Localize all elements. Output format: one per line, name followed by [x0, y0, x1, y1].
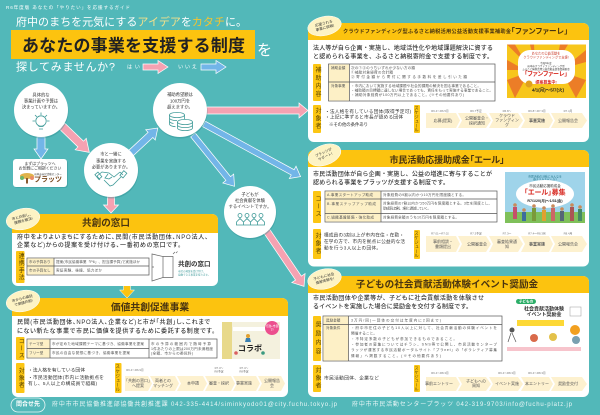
tag: schedule: スケジュール — [414, 366, 420, 392]
arrow: no to Yell — [201, 118, 304, 183]
badge: value co-creation: 市からの委託 — [11, 293, 34, 303]
legend: yes arrow: はい — [127, 64, 140, 70]
chevron schedule: R6.4～R8.3月 — [431, 371, 449, 375]
tag: schedule: スケジュール — [414, 231, 420, 258]
icon: coins — [170, 112, 192, 131]
description: 企業など)からの提案を受け付ける、一番初めの窓口です。 — [17, 241, 181, 249]
contact pill — [11, 398, 45, 412]
circle: plan decided: 事業計画や予算は — [24, 98, 59, 104]
icon: door — [152, 252, 178, 281]
eligibility text: ・市民活動団体(市内に活動拠点を — [28, 374, 104, 381]
description: 認められる事業をプラッツが支援する制度です。 — [313, 178, 449, 186]
contact: Platz: 府中市市民活動センタープラッツ 042-319-9703/info@fuchu-platz.jp — [352, 400, 573, 408]
chevron schedule: R7.01～R7.02 — [431, 232, 449, 236]
chevron schedule: R7.3予定 — [470, 232, 482, 236]
tag: course — [313, 191, 321, 223]
table: course: B.事業ステップアップ助成 — [327, 201, 376, 206]
description — [17, 318, 215, 335]
legend: no arrow — [178, 60, 226, 74]
eligibility text: 在学の方で、市内を拠点に公益的な活 — [324, 238, 405, 245]
tag: course — [16, 337, 24, 360]
circle: plan decided: 具体的な — [32, 92, 50, 98]
image: Fanfare flyer — [507, 44, 586, 98]
description: と認められる事業を、ふるさと納税寄附金で支援する制度です。 — [313, 52, 493, 60]
chevron schedule: 子どもへの — [466, 378, 486, 384]
image: Yell flyer: 市民活動応援助成金 — [529, 183, 561, 188]
table: subsidy details: 対象事業 — [331, 83, 346, 88]
eligibility text: 市民活動団体、企業など — [324, 374, 379, 382]
chevron schedule — [426, 232, 587, 252]
table: course: A.事業スタートアップ助成 — [327, 192, 373, 197]
description: 民間(市民活動団体、NPO法人、企業など)と市が「共創」し、これまで — [17, 318, 210, 326]
table: course: 市の予算の範囲内で随時予算 — [151, 341, 211, 346]
table: course: フリー型 — [29, 350, 44, 355]
chevron schedule: R6.7予定 — [470, 109, 482, 113]
chevron schedule: 公開報告 — [264, 377, 280, 383]
table: subsidy details: ①補助対象経費の合計額 — [351, 70, 393, 74]
chevron schedule: 公開審査会・ — [465, 114, 489, 120]
table: subsidy details: ・補助対象経費が100万円以上であること。(※その他要件あり) — [351, 92, 464, 97]
chevron schedule: R6.8～R7.3月 — [528, 109, 546, 113]
table: course: C.組織基盤整備・強化助成 — [327, 214, 374, 220]
table: course: 助成率は5割、3割と逓減していく。 — [383, 206, 431, 210]
panel: Yell grant — [308, 150, 589, 266]
window label: 市民の発案を受け付け、 — [178, 269, 205, 273]
image: Fanfare flyer: 府中市クラウドファンディング型 — [527, 64, 565, 68]
tag: subsidy details — [313, 64, 321, 101]
arrow: yes to consultation window — [104, 196, 118, 213]
heading: 「ファンファーレ」 — [511, 26, 568, 36]
image: Yell flyer: R7/1/20(月)～1/31(金) — [527, 198, 563, 203]
panel: children's award — [308, 276, 589, 397]
badge: children's award — [306, 266, 343, 292]
tag: eligibility — [16, 363, 24, 393]
callout: Platz consultation: お気軽にご相談ください — [19, 166, 61, 170]
legend: yes arrow — [127, 60, 168, 74]
description: にない新たな事業で市民に価値を提供するために委託する制度です。 — [17, 327, 215, 335]
chevron schedule: 応募(提案) — [434, 117, 453, 123]
table: award details: 3万円/回(一団体の交付は年度内に2回まで) — [351, 318, 441, 322]
table: subsidy details: ②寄付金額から寄付に関する手数料を差し引いた額 — [351, 74, 467, 79]
table: method — [27, 258, 149, 275]
tag: schedule: スケジュール — [414, 106, 420, 133]
tag: method — [16, 251, 24, 283]
image: Yell flyer: 「エール」募集 — [524, 188, 566, 196]
chevron schedule: R8予定 — [239, 370, 249, 374]
eligibility text: 有し、5人以上の構成員で組織) — [28, 380, 97, 387]
callout: Platz consultation: 府中市市民活動センター — [34, 172, 62, 176]
table: award details: ラッツが運営する市民活動ポータルサイト「プラnet」の「ボランティア募集 — [351, 347, 497, 352]
table: award details: 対象条件 — [326, 325, 341, 330]
tag: eligibility — [313, 105, 321, 133]
tag: award details — [313, 316, 321, 361]
table: course: 市民の自由な発想に基づき、協働事業を提案 — [52, 350, 130, 355]
chevron schedule: 審査・採択 — [209, 380, 229, 386]
eligibility text: 動を行う3人以上の団体。 — [324, 244, 381, 252]
chevron schedule: R7.3～ — [215, 366, 224, 370]
tag: eligibility: 対象者 — [314, 367, 321, 390]
contact pill: 問合せ先 — [16, 400, 40, 408]
chevron schedule: 本エントリー — [525, 380, 549, 386]
eligibility text — [28, 366, 104, 387]
chevron schedule: 審査結果通 — [497, 238, 517, 244]
table: subsidy details — [328, 64, 495, 101]
chevron schedule — [425, 371, 587, 391]
people — [513, 203, 582, 221]
heading — [343, 26, 568, 36]
window label — [178, 259, 210, 276]
tag: eligibility: 対象者 — [314, 107, 321, 130]
chevron schedule: 公開審査会 — [467, 240, 487, 246]
eligibility text: ・法人格を有している団体(取得予定可) — [325, 108, 411, 115]
image: children's award flyer: イベント奨励金 — [526, 311, 562, 318]
table: subsidy details: 次の①②のうちいずれか少ない方の額 — [351, 65, 415, 70]
image: Yell flyer: 市民活動の活動にみんなを — [528, 174, 562, 178]
callout: Platz consultation: まずはプラッツへ — [24, 161, 56, 166]
chevron schedule: 事業実施 — [236, 380, 252, 386]
image: Yell flyer — [505, 172, 585, 223]
description: 法人等が自ら企画・実施し、地域活性化や地域課題解決に資する — [313, 44, 493, 52]
table: course — [27, 339, 217, 358]
eligibility text: ・法人格を有している団体 — [28, 366, 85, 374]
table: course: 対象経費の7割以内かつ50万円を限度額とする。3年を限度とし、 — [383, 200, 492, 206]
table: award details: 情報」へ掲載すること。(※その他要件あり) — [351, 353, 441, 358]
tag: schedule: スケジュール — [115, 364, 121, 392]
image: collaboration flyer: で! — [270, 328, 274, 332]
tag: award details: 奨励内容 — [314, 320, 321, 357]
circle: children's experience — [224, 186, 276, 240]
arrow: yes to children's award — [259, 226, 311, 291]
circle: over 1 million yen: 超えますか。 — [167, 104, 193, 110]
heading: 市民活動応援助成金「エール」 — [390, 154, 504, 165]
title banner: あなたの事業を支援する制度 — [22, 36, 245, 56]
heading: 子どもの社会貢献活動体験イベント奨励金 — [356, 278, 539, 290]
image: Fanfare flyer: 令和6年度 — [540, 61, 552, 65]
badge: value co-creation: で価値共創! — [14, 298, 33, 307]
eligibility text — [325, 108, 411, 128]
circle: work with city — [84, 143, 138, 198]
circle: over 1 million yen — [153, 83, 208, 138]
image: Fanfare flyer: 提案募集中! — [535, 78, 557, 84]
eligibility text — [324, 232, 405, 252]
image: Fanfare flyer: クラウドファンディングで支援! — [523, 54, 569, 60]
chevron schedule: R6.4～R8.3月 — [528, 371, 546, 375]
circle: children's experience: 社会貢献を体験 — [235, 197, 266, 204]
image: children's award flyer — [505, 298, 585, 351]
description: 府中をよりよいまちにするために、民間(市民活動団体、NPO法人、 — [17, 233, 208, 241]
image: Yell flyer: 巻き込みませんか? — [533, 178, 557, 182]
chevron schedule: 事前エントリー — [425, 380, 453, 386]
edition line: R6年度版 あなたの「やりたい」を応援するガイド — [6, 4, 130, 11]
chevron schedule: R7.4～ — [240, 366, 249, 370]
description: 市民活動団体が自ら企画・実施し、公益の増進に寄与することが — [313, 170, 492, 178]
tagline: 府中のまちを元気にするアイデアをカタチに。 — [16, 14, 247, 28]
badge: value co-creation — [4, 287, 42, 315]
chevron schedule: R8予定 — [214, 370, 224, 374]
contact: co-creation section: 府中市市民協働推進部協働共創推進課 042-335-4414/siminkyodo01@city.fuchu.tokyo.jp — [52, 400, 338, 408]
badge: window: 市と共創し、 — [11, 211, 33, 221]
contact footer — [11, 398, 573, 412]
icon: tree logo — [20, 173, 34, 184]
table: method: 市の予算なし — [29, 268, 51, 272]
chevron schedule — [124, 366, 285, 391]
description — [313, 294, 484, 310]
description: るイベントを実施した場合に奨励金を交付する制度です。 — [313, 302, 472, 310]
chevron schedule: R7.3～ — [503, 232, 512, 236]
badge: Yell — [305, 140, 344, 170]
chevron schedule: R8.4月 — [564, 232, 573, 236]
chevron schedule: 公開報告会 — [558, 117, 578, 123]
table: subsidy details: ・補助額の目標額に達しない場合であっても、責任をもって実施する事業であること。 — [351, 88, 493, 92]
chevron schedule: 周知 — [472, 382, 480, 388]
arrow: yes to circle 3 — [56, 120, 95, 158]
image: children's award flyer: 社会貢献活動体験 — [524, 306, 564, 312]
circle: work with city: 事業を実施する — [96, 158, 126, 164]
image: collaboration flyer: コラボ — [238, 343, 262, 353]
tag: subsidy details: 補助内容 — [314, 66, 321, 98]
arrow: no to circle 2 — [125, 123, 163, 159]
badge: Yell: サポート! — [317, 151, 333, 162]
tag: eligibility — [313, 365, 321, 392]
children illustrations — [507, 328, 581, 351]
image: collaboration flyer — [222, 321, 280, 359]
description — [313, 44, 493, 60]
table: award details: ・府中市在住の子ども10人以上に対して、社会貢献活動の体験イベントを — [351, 325, 497, 330]
image: collaboration flyer: 行政+市民 — [266, 324, 279, 328]
chevron schedule: 会 — [270, 382, 274, 388]
chevron schedule: 知 — [505, 243, 509, 249]
arrow: yes to Fanfare — [205, 103, 308, 118]
chevron schedule: 採択通知 — [469, 120, 485, 126]
table: award details: 奨励金額 — [326, 318, 341, 322]
image: Fanfare flyer: ふるさと納税活用公益活動支援事業補助金 — [522, 67, 570, 71]
chevron schedule: 事業実施 — [529, 117, 545, 123]
callout: Platz consultation — [13, 159, 68, 188]
chevron schedule: 両者との — [155, 377, 171, 383]
circle: work with city: 必要がありますか。 — [92, 164, 130, 170]
circle: over 1 million yen: 補助希望額は — [167, 91, 194, 98]
chevron schedule: 書類提出 — [435, 243, 451, 249]
image: Fanfare flyer: 「ファンファーレ」 — [524, 71, 568, 78]
legend: no arrow: いいえ — [178, 64, 197, 70]
title suffix: を — [257, 42, 272, 59]
tag: method: 連携手法 — [17, 252, 24, 281]
badge: window: 課題を解決! — [14, 216, 33, 225]
table: award details: 開催すること。 — [351, 330, 377, 336]
table: course: 市が定めた地域課題テーマに基づき、協働事業を提案 — [52, 341, 144, 346]
image: Fanfare flyer: あなたの公益活動を — [532, 50, 560, 56]
table: course: 1件あたりの上限は200万円未満程度 — [151, 346, 213, 351]
table: subsidy details: ・市内において実施する地域課題や社会的課題の解決を図る事業であること。 — [351, 83, 481, 88]
table: method: 市の予算あり — [29, 259, 51, 264]
icon: light bulb — [32, 112, 50, 129]
eligibility text: 構成員の3割以上が市内在住・在勤・ — [324, 232, 404, 238]
chevron schedule: グ — [505, 121, 509, 127]
table: award details: ・参加者の募集についてはチラシ、SNS等で公開し、市民活動センタープ — [351, 342, 497, 346]
table: subsidy details: 補助金額 — [331, 65, 346, 70]
tag: eligibility: 対象者 — [17, 367, 24, 389]
panel: Fanfare subsidy — [308, 23, 589, 142]
chevron schedule: ファンディン — [495, 116, 519, 122]
table: course: 対象経費の9割以内かつ10万円を限度額とする。 — [383, 192, 466, 197]
icon: people — [236, 214, 264, 225]
badge: Fanfare — [306, 13, 343, 39]
table: course: (全額、市からの委託料) — [151, 350, 193, 356]
circle: children's experience: 子どもが — [241, 191, 259, 198]
arrow: no to circle 4 — [188, 131, 240, 191]
chevron schedule: 公開報告会 — [558, 240, 578, 246]
chevron schedule: R6.4～R8.3月 — [498, 371, 516, 375]
circle: work with city: 市と一緒に — [100, 150, 122, 158]
badge: children's award: 子どもに社会 — [313, 271, 335, 281]
tag: course: コース — [17, 338, 24, 359]
image: Fanfare flyer: 4/1(月)～5/7(火) — [532, 88, 564, 94]
chevron schedule: R7.4～R8.3月 — [528, 232, 546, 236]
circle: plan decided — [14, 83, 68, 138]
chevron schedule: 「共創の窓口」 — [124, 377, 152, 383]
description — [17, 233, 208, 249]
badge: Yell: プラッツが — [314, 146, 333, 158]
chevron schedule: 本申請 — [187, 380, 199, 386]
table: course — [325, 191, 497, 222]
badge: window — [4, 205, 42, 233]
table: course: テーマ型 — [29, 341, 44, 346]
tag: eligibility — [313, 229, 321, 259]
tag: course: コース — [314, 196, 321, 218]
chevron schedule: マッチング — [153, 382, 173, 388]
icon: handshake — [95, 171, 127, 186]
circle: children's experience: するイベントですか。 — [229, 203, 271, 210]
heading: 共創の窓口 — [82, 217, 130, 229]
panel: consultation window — [12, 214, 218, 286]
chevron schedule: R6.4～R6.5月 — [431, 109, 449, 113]
badge: children's award: 貢献体験を! — [315, 276, 335, 285]
chevron schedule: クラウド — [499, 112, 515, 118]
chevron schedule: R6.8～ — [503, 109, 512, 113]
callout: Platz consultation: プラッツ — [34, 176, 62, 184]
window label: 共創の窓口 — [178, 259, 210, 268]
image: children's award flyer: 子どもの — [519, 298, 534, 304]
window label: 協働できる事業を探ります。 — [178, 272, 210, 276]
eligibility text: ・上記に準ずると市長が認める団体 — [325, 114, 403, 120]
heading: 価値共創促進事業 — [111, 300, 189, 314]
description: 市民活動団体や企業等が、子どもに社会貢献活動を体験させ — [313, 294, 484, 302]
chevron schedule: R7.4月 — [564, 109, 573, 113]
table: award details — [323, 316, 502, 361]
table: course: 対象経費全額のうち10万円を限度額とする。 — [383, 214, 459, 220]
tag: eligibility: 対象者 — [314, 232, 321, 255]
table: method: 提案(市民協働事業「P6」、担当課予算)で実施ほか — [56, 259, 140, 264]
table: method: 実証実験、後援、協力ほか — [56, 268, 102, 272]
panel: value co-creation — [12, 298, 288, 397]
title banner — [11, 30, 255, 59]
question line: 探してみませんか? — [16, 60, 115, 74]
arrow: window to value co-creation — [120, 284, 134, 298]
chevron schedule: へ提案 — [132, 382, 144, 388]
chevron schedule — [426, 109, 587, 128]
circle: plan decided: 決まっていますか。 — [22, 104, 60, 110]
chevron schedule: 事前相談・ — [433, 238, 453, 244]
eligibility text: ※その他の条件あり — [329, 121, 368, 128]
chevron schedule: R6.4～R6.9月 — [126, 368, 144, 372]
badge: Fanfare: 応援される — [314, 18, 333, 28]
heading: クラウドファンディング型ふるさと納税活用公益活動支援事業補助金 — [343, 27, 512, 35]
circle: over 1 million yen: 100万円を — [170, 98, 190, 104]
chevron schedule: 事業実施 — [529, 240, 545, 246]
chevron schedule: イベント実施 — [495, 380, 519, 386]
badge: Fanfare: 事業に挑戦! — [315, 23, 335, 32]
description — [313, 170, 492, 186]
chevron schedule: 奨励金交付 — [558, 380, 578, 386]
arrow: no to Platz — [34, 137, 48, 159]
table: award details: ・不特定多数の子どもが参加できるものであること。 — [351, 336, 457, 341]
